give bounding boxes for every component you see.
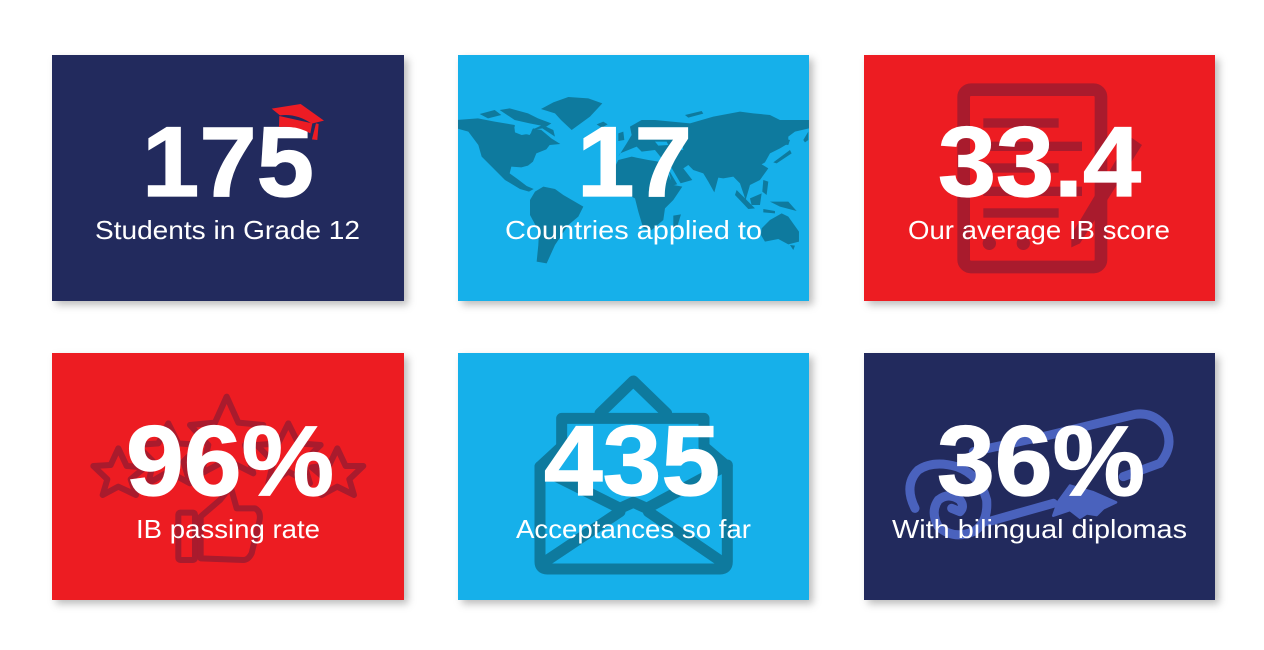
label: IB passing rate: IB passing rate — [136, 514, 320, 544]
icon: graduation cap — [272, 104, 324, 140]
icon: diploma scroll with seal — [910, 414, 1169, 535]
card background navy — [52, 55, 404, 301]
seas and bays cut out of the land — [514, 126, 532, 135]
number 96%: 96% — [126, 405, 334, 516]
number 175: 175 — [142, 106, 314, 217]
panel: average IB score — [864, 55, 1215, 301]
label: our average IB score: Our average IB score — [908, 215, 1170, 245]
number 435: 435 — [544, 405, 720, 516]
number 17: 17 — [577, 106, 692, 217]
label: with bilingual diplomas: With bilingual diplomas — [892, 514, 1187, 544]
panel: countries applied to — [457, 55, 809, 301]
number 36%: 36% — [937, 405, 1145, 516]
card background red — [52, 353, 404, 600]
icon: world map — [457, 97, 809, 263]
label: countries applied to: Countries applied to — [505, 215, 762, 245]
panel: acceptances so far — [458, 353, 809, 600]
icon: exam paper and pencil — [964, 90, 1142, 267]
panel: IB passing rate — [52, 353, 404, 600]
icon: stars and thumbs up — [93, 397, 363, 560]
panel: bilingual diplomas — [864, 353, 1215, 600]
panel: students in grade 12 — [52, 55, 404, 301]
number 33.4: 33.4 — [938, 106, 1141, 217]
icon: open envelope — [540, 381, 727, 569]
card background navy — [864, 353, 1215, 600]
label: acceptances so far: Acceptances so far — [516, 514, 751, 544]
label: students in grade 12: Students in Grade 12 — [95, 215, 360, 245]
card background blue — [458, 353, 809, 600]
card background blue — [458, 55, 809, 301]
card background red — [864, 55, 1215, 301]
